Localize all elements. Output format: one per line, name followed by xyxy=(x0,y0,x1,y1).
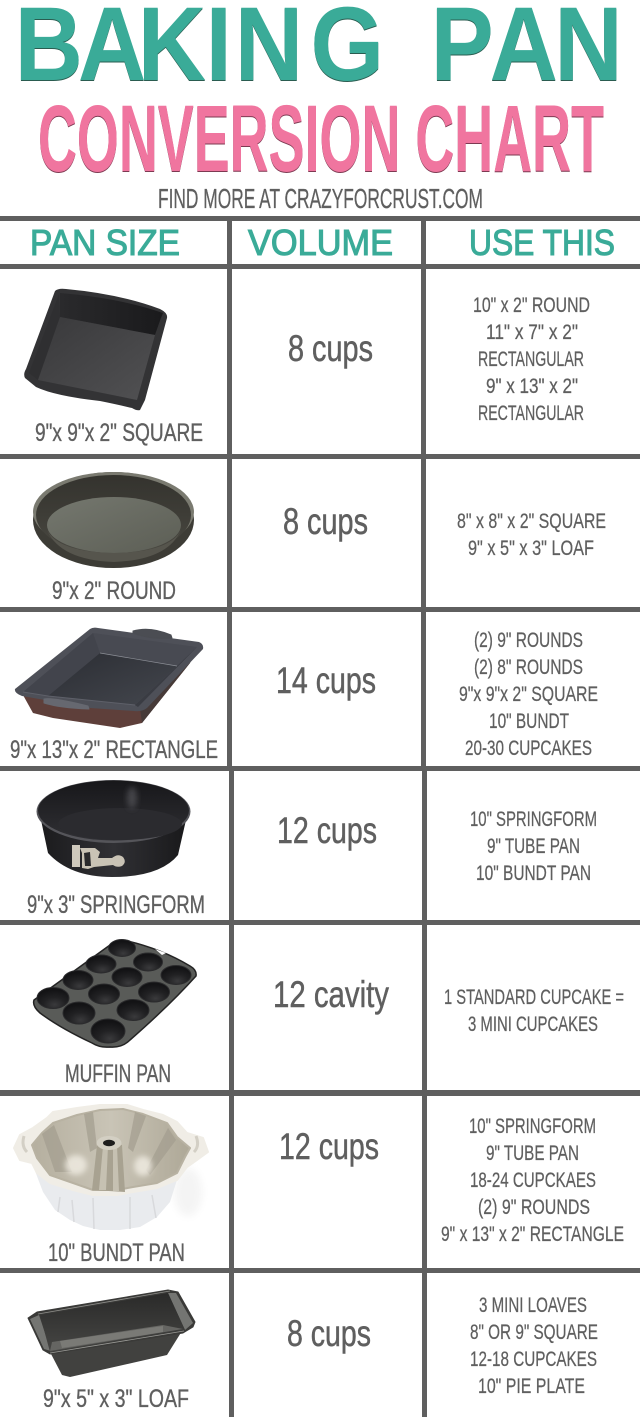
row: 9x2 round xyxy=(33,472,606,605)
pan label: 9"x 2" ROUND xyxy=(52,577,176,605)
row: 9x3 springform xyxy=(27,780,597,919)
substitutes: 9" TUBE PAN xyxy=(486,1142,579,1165)
volume: 12 cavity xyxy=(273,974,389,1015)
title xyxy=(15,0,623,214)
icon: loaf pan xyxy=(28,1290,195,1377)
substitutes: 11" x 7" x 2" xyxy=(486,321,578,344)
volume: 12 cups xyxy=(279,1126,379,1167)
icon: latch xyxy=(72,845,125,869)
substitutes: 10" BUNDT xyxy=(489,710,569,733)
pan label: MUFFIN PAN xyxy=(65,1060,171,1088)
row: 9x13x2 rectangle xyxy=(10,628,598,764)
volume: 8 cups xyxy=(287,1313,371,1354)
icon: muffin pan xyxy=(34,940,196,1047)
icon: bundt pan xyxy=(14,1105,208,1230)
row: 9x9x2 square xyxy=(24,289,590,447)
column header: pan size: PAN SIZE xyxy=(30,222,180,263)
substitutes xyxy=(459,629,598,760)
substitutes: (2) 9" ROUNDS xyxy=(478,1196,590,1219)
icon: springform pan xyxy=(36,780,190,877)
substitutes: (2) 8" ROUNDS xyxy=(474,656,583,679)
substitutes: 10" PIE PLATE xyxy=(478,1375,585,1398)
substitutes: RECTANGULAR xyxy=(478,348,584,371)
substitutes xyxy=(470,1294,598,1398)
substitutes: 10" BUNDT PAN xyxy=(476,862,591,885)
substitutes: 9" x 5" x 3" LOAF xyxy=(468,537,594,560)
substitutes: 3 MINI LOAVES xyxy=(479,1294,587,1317)
substitutes: 10" x 2" ROUND xyxy=(473,294,590,317)
pan label: 10" BUNDT PAN xyxy=(48,1239,185,1267)
row: 9x5x3 loaf xyxy=(28,1290,598,1413)
substitutes xyxy=(441,1115,624,1246)
substitutes: (2) 9" ROUNDS xyxy=(474,629,583,652)
pan label: 9"x 9"x 2" SQUARE xyxy=(35,419,203,447)
row: muffin pan xyxy=(34,940,624,1088)
pan label: 9"x 3" SPRINGFORM xyxy=(27,891,205,919)
volume: 14 cups xyxy=(276,660,376,701)
substitutes: 9" x 13" x 2" xyxy=(486,375,578,398)
substitutes: 9"x 9"x 2" SQUARE xyxy=(459,683,598,706)
pan label: 9"x 13"x 2" RECTANGLE xyxy=(10,736,218,764)
icon: square pan xyxy=(24,289,167,410)
substitutes: 12-18 CUPCAKES xyxy=(470,1348,597,1371)
column header: use this: USE THIS xyxy=(469,222,615,263)
substitutes: RECTANGULAR xyxy=(478,402,584,425)
pan label: 9"x 5" x 3" LOAF xyxy=(43,1385,189,1413)
substitutes: 18-24 CUPCKAES xyxy=(470,1169,596,1192)
volume: 8 cups xyxy=(283,501,368,542)
icon: rectangular pan xyxy=(15,628,203,728)
substitutes xyxy=(457,510,606,560)
column header: volume: VOLUME xyxy=(248,222,393,263)
substitutes xyxy=(470,808,597,885)
volume: 8 cups xyxy=(288,328,373,369)
substitutes: 9" TUBE PAN xyxy=(487,835,580,858)
volume: 12 cups xyxy=(277,810,377,851)
table header xyxy=(30,222,615,263)
substitutes xyxy=(444,986,624,1036)
icon: round pan xyxy=(33,472,194,568)
substitutes: 20-30 CUPCAKES xyxy=(465,737,592,760)
row: 10 inch bundt pan xyxy=(14,1105,624,1267)
substitutes xyxy=(473,294,590,425)
